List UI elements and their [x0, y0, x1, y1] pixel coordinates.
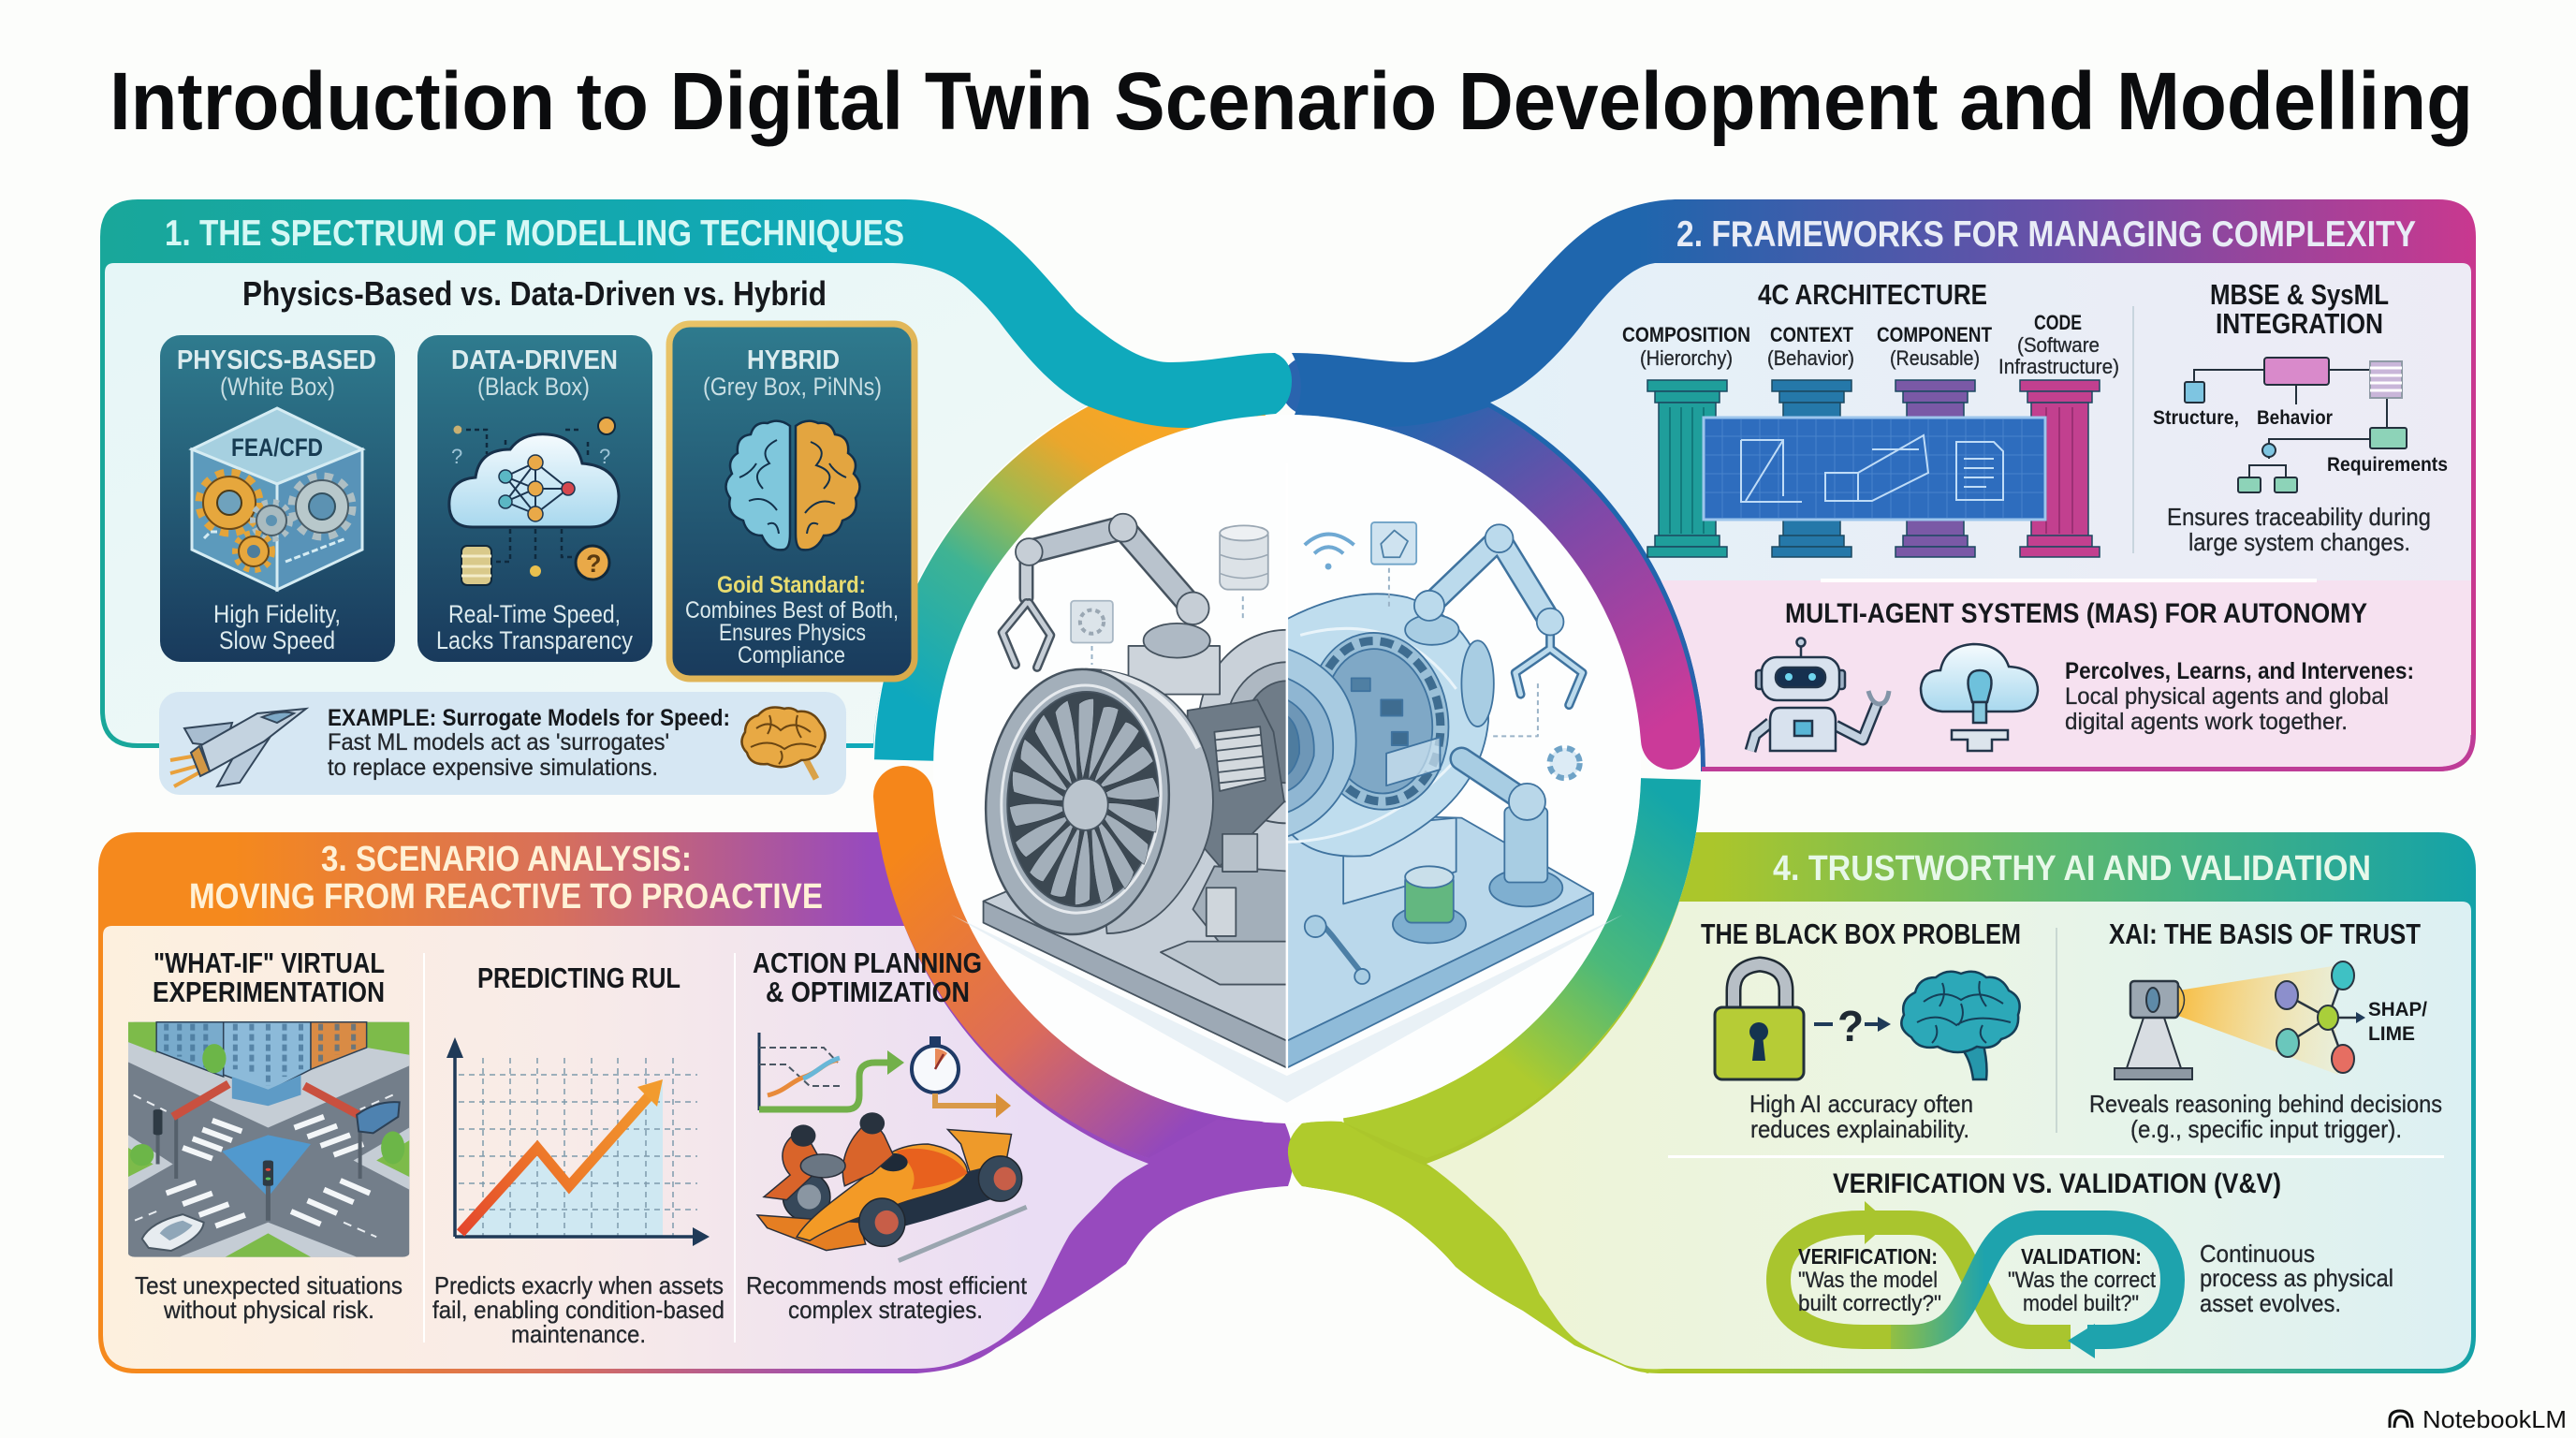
diagram: infinity loop — [1778, 1201, 2173, 1358]
icon: robot agent — [1750, 638, 1889, 751]
caption: XAI — [2089, 1090, 2442, 1143]
4C labels: (Reusable) — [1890, 346, 1980, 370]
icon: cloud agent — [1921, 644, 2038, 751]
action planning heading: ACTION PLANNING — [753, 946, 982, 979]
black box heading: THE BLACK BOX PROBLEM — [1701, 917, 2021, 950]
MAS description: Percolves, Learns, and Intervenes: — [2065, 658, 2414, 684]
diagram labels: Requirements — [2327, 454, 2448, 476]
caption: RUL: fail, enabling condition-based — [432, 1296, 724, 1324]
caption: RUL — [432, 1271, 724, 1348]
database icon — [461, 546, 491, 585]
caption: what-if: without physical risk. — [163, 1296, 374, 1324]
4C labels: (Hierorchy) — [1640, 346, 1733, 370]
title: Introduction to Digital Twin Scenario Development and Modelling — [110, 56, 2473, 147]
icon: spotlight on network — [2115, 961, 2365, 1079]
verification text: built correctly?" — [1798, 1291, 1941, 1316]
MBSE caption — [2167, 503, 2431, 556]
4C labels: CONTEXT — [1770, 323, 1853, 346]
4C architecture heading: 4C ARCHITECTURE — [1758, 278, 1987, 311]
4C labels: (Behavior) — [1767, 346, 1854, 370]
caption: RUL: maintenance. — [511, 1320, 646, 1348]
illustration: F1 pit stop — [757, 1112, 1027, 1261]
panel 3 heading: 3. SCENARIO ANALYSIS: — [321, 840, 692, 879]
4C labels: (Software — [2017, 333, 2100, 357]
icon: teal brain — [1901, 972, 2020, 1079]
SHAP / LIME label — [2368, 999, 2427, 1045]
diagram labels — [2153, 407, 2448, 476]
panel: 1 spectrum of modelling techniques — [100, 199, 1292, 795]
caption: action planning: complex strategies. — [788, 1296, 983, 1324]
card caption line 2: Lacks Transparency — [436, 626, 633, 654]
icon: question arrow: ? — [1837, 1002, 1864, 1050]
V&V heading: VERIFICATION VS. VALIDATION (V&V) — [1833, 1168, 2281, 1199]
body — [797, 1144, 968, 1240]
question badge: ? — [586, 550, 601, 578]
icon: cloud neural network — [449, 418, 619, 585]
panel: 2 frameworks for managing complexity — [1292, 199, 2481, 777]
front wing — [757, 1215, 866, 1251]
panel 2 heading: 2. FRAMEWORKS FOR MANAGING COMPLEXITY — [1676, 214, 2416, 255]
4C labels — [1622, 311, 2119, 378]
gold standard label: Goid Standard: — [717, 572, 866, 598]
gears — [199, 473, 352, 570]
icon: orange brain — [741, 708, 826, 779]
card caption: Combines Best of Both, — [685, 597, 899, 624]
continuous process note: asset evolves. — [2200, 1289, 2341, 1317]
4C labels: CODE — [2034, 311, 2082, 334]
blueprint banner — [1704, 418, 2045, 520]
digital half — [1287, 594, 1593, 1068]
panel: 3 scenario analysis — [98, 832, 1293, 1373]
caption: RUL: Predicts exacrly when assets — [434, 1271, 724, 1299]
central digital twin machine — [933, 415, 1641, 1123]
caption: action planning — [746, 1271, 1028, 1324]
continuous process note — [2200, 1240, 2393, 1317]
mechanics — [764, 1129, 820, 1200]
caption: XAI: (e.g., specific input trigger). — [2130, 1115, 2402, 1143]
what-if heading — [153, 946, 385, 1008]
caption: action planning: Recommends most efficient — [746, 1271, 1028, 1299]
card caption line 2: Slow Speed — [219, 626, 335, 654]
card heading: PHYSICS-BASED — [177, 345, 376, 375]
verification text — [1798, 1244, 1941, 1316]
panel 1 heading: 1. THE SPECTRUM OF MODELLING TECHNIQUES — [165, 213, 904, 254]
card subheading: (Grey Box, PiNNs) — [703, 373, 882, 401]
chart: RUL trend — [446, 1037, 710, 1246]
validation text: VALIDATION: — [2021, 1244, 2142, 1269]
example line 1: Fast ML models act as 'surrogates' — [328, 729, 669, 756]
MBSE heading — [2210, 278, 2389, 340]
action planning heading: & OPTIMIZATION — [766, 976, 970, 1008]
continuous process note: process as physical — [2200, 1264, 2393, 1292]
question badge — [576, 546, 609, 580]
predicting RUL heading: PREDICTING RUL — [477, 961, 681, 994]
caption: black box: reduces explainability. — [1750, 1115, 1969, 1143]
example heading: EXAMPLE: Surrogate Models for Speed: — [328, 705, 730, 731]
card caption line 3: Compliance — [738, 642, 845, 668]
card: physics-based — [160, 335, 395, 662]
card: data-driven — [417, 335, 652, 662]
diagram labels: Structure, — [2153, 407, 2239, 429]
validation text — [2008, 1244, 2156, 1316]
card subheading: (Black Box) — [477, 373, 590, 401]
icon: jet — [170, 709, 306, 786]
what-if heading: "WHAT-IF" VIRTUAL — [154, 946, 385, 979]
icon: planning chart and stopwatch — [759, 1033, 1011, 1118]
right robot arm — [1405, 524, 1583, 705]
MAS description: Local physical agents and global — [2065, 683, 2389, 710]
panel 1 subtitle: Physics-Based vs. Data-Driven vs. Hybrid — [242, 274, 827, 313]
rear wing — [947, 1129, 1012, 1175]
panel: 4 trustworthy AI and validation — [1288, 832, 2476, 1373]
card caption line 2: Ensures Physics — [719, 620, 866, 646]
panel 3 heading: MOVING FROM REACTIVE TO PROACTIVE — [189, 877, 823, 917]
icon: transparent cube with gears — [192, 408, 362, 590]
pillar: code — [2020, 380, 2100, 557]
what-if heading: EXPERIMENTATION — [153, 976, 385, 1008]
MAS description — [2065, 658, 2414, 735]
verification text: VERIFICATION: — [1798, 1244, 1938, 1269]
pillar: component — [1895, 380, 1975, 557]
4C labels: Infrastructure) — [1998, 355, 2119, 378]
floating data icons — [1071, 522, 1580, 778]
card heading: DATA-DRIVEN — [451, 345, 618, 375]
SHAP / LIME label: LIME — [2368, 1023, 2415, 1045]
physical half — [983, 629, 1286, 1068]
XAI heading: XAI: THE BASIS OF TRUST — [2109, 917, 2421, 950]
validation text: "Was the correct — [2008, 1268, 2156, 1293]
dark floor — [846, 1164, 1010, 1240]
panel 3 heading — [189, 840, 823, 917]
rotor drum — [1296, 624, 1460, 818]
card caption: High Fidelity, — [213, 600, 341, 628]
MBSE caption: large system changes. — [2188, 528, 2410, 556]
icon: question arrow — [1814, 1002, 1891, 1050]
card subheading: (White Box) — [220, 373, 335, 401]
panel 4 heading: 4. TRUSTWORTHY AI AND VALIDATION — [1773, 849, 2371, 888]
chart: SysML block diagram — [2185, 358, 2407, 492]
verification text: "Was the model — [1798, 1268, 1938, 1293]
machine illustration — [951, 463, 1623, 1103]
icon: padlock — [1715, 964, 1804, 1079]
4C labels: COMPOSITION — [1622, 323, 1750, 346]
callout: surrogate models example — [159, 692, 846, 795]
chart: four pillars with blueprint banner — [1647, 380, 2100, 557]
caption: what-if: Test unexpected situations — [135, 1271, 402, 1299]
central ring — [903, 386, 1671, 1151]
caption: black box — [1749, 1090, 1973, 1143]
MBSE caption: Ensures traceability during — [2167, 503, 2431, 531]
FEA label: FEA/CFD — [231, 433, 323, 462]
diagram labels: Behavior — [2257, 407, 2333, 429]
card caption: Real-Time Speed, — [448, 600, 621, 628]
continuous process note: Continuous — [2200, 1240, 2315, 1268]
question marks: ? — [451, 445, 462, 468]
MBSE heading: INTEGRATION — [2216, 307, 2383, 340]
4C labels: COMPONENT — [1877, 323, 1992, 346]
MAS heading: MULTI-AGENT SYSTEMS (MAS) FOR AUTONOMY — [1785, 598, 2367, 629]
SHAP / LIME label: SHAP/ — [2368, 999, 2427, 1020]
question marks right: ? — [599, 445, 610, 468]
MAS description: digital agents work together. — [2065, 709, 2348, 735]
caption: XAI: Reveals reasoning behind decisions — [2089, 1090, 2442, 1118]
example line 2: to replace expensive simulations. — [328, 755, 658, 781]
illustration: city intersection — [128, 1022, 409, 1257]
NotebookLM logo: NotebookLM — [2422, 1405, 2567, 1433]
concentric front rings — [1287, 649, 1356, 837]
action planning heading — [753, 946, 982, 1008]
pillar: composition — [1647, 380, 1727, 557]
caption: black box: High AI accuracy often — [1749, 1090, 1973, 1118]
left robot arm — [1003, 514, 1210, 668]
card: hybrid — [669, 324, 915, 679]
pillar: context — [1772, 380, 1852, 557]
MBSE heading: MBSE & SysML — [2210, 278, 2389, 311]
card heading: HYBRID — [747, 345, 840, 375]
icon: NotebookLM mark — [2390, 1411, 2412, 1428]
caption: what-if — [135, 1271, 402, 1324]
icon: half blue half orange brain — [725, 421, 860, 550]
validation text: model built?" — [2023, 1291, 2139, 1316]
